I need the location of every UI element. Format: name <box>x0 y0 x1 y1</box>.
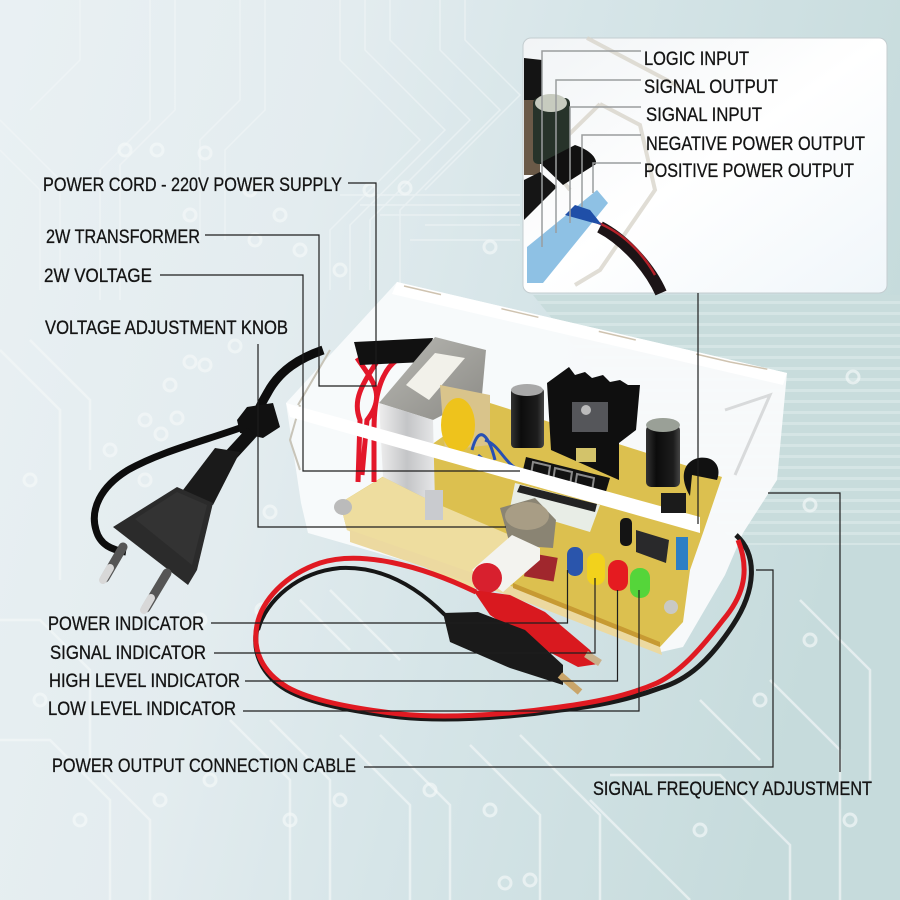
label: voltage: 2W VOLTAGE <box>44 266 152 287</box>
acrylic edge <box>545 38 680 285</box>
label: high level indicator: HIGH LEVEL INDICATOR <box>49 671 240 692</box>
ic <box>661 493 686 513</box>
capacitor arc <box>684 458 719 496</box>
transistor cube <box>636 530 669 563</box>
label: output cable: POWER OUTPUT CONNECTION CABLE <box>52 756 356 777</box>
acrylic case with circuit board <box>286 282 787 655</box>
wiring <box>357 358 397 482</box>
label: low level indicator: LOW LEVEL INDICATOR <box>48 699 236 720</box>
plug pins <box>105 547 123 578</box>
pcb <box>340 403 722 647</box>
knob <box>472 535 558 593</box>
cord knot <box>237 403 280 438</box>
label: power indicator: POWER INDICATOR <box>48 614 204 635</box>
led: signal yellow <box>587 553 605 585</box>
label: knob: VOLTAGE ADJUSTMENT KNOB <box>45 318 288 339</box>
plug body <box>113 487 213 585</box>
cable <box>600 227 661 293</box>
case body <box>286 282 787 652</box>
led: power blue <box>567 547 583 576</box>
capacitor <box>533 98 570 164</box>
front acrylic strip <box>286 403 700 533</box>
inset panel: output terminals <box>523 38 887 293</box>
red clip <box>473 590 598 667</box>
label: signal indicator: SIGNAL INDICATOR <box>50 643 206 664</box>
label: logic input: LOGIC INPUT <box>644 49 749 70</box>
label: positive power output: POSITIVE POWER OUTPUT <box>644 161 854 182</box>
blue terminal <box>527 190 608 283</box>
black arc <box>540 145 596 185</box>
transformer <box>334 337 490 520</box>
heatsink <box>524 58 542 100</box>
leader lines <box>160 183 840 772</box>
power output cable with clips <box>256 535 751 719</box>
pointer lines <box>542 51 641 247</box>
label: power cord: POWER CORD - 220V POWER SUPPLY <box>43 175 342 196</box>
potentiometer <box>500 498 556 548</box>
power cord and plug <box>94 350 323 610</box>
label: signal input: SIGNAL INPUT <box>646 105 762 126</box>
blue wires <box>472 435 520 475</box>
heatsink <box>547 367 640 480</box>
capacitor right <box>646 425 680 487</box>
label: negative power output: NEGATIVE POWER OUTPUT <box>646 134 865 155</box>
led: high red <box>608 560 628 591</box>
capacitor left <box>511 388 544 448</box>
label: signal output: SIGNAL OUTPUT <box>644 77 778 98</box>
led: low green <box>630 568 650 598</box>
digital display <box>510 457 610 532</box>
label: transformer: 2W TRANSFORMER <box>46 227 200 248</box>
strain relief <box>183 448 240 505</box>
black clip <box>443 612 563 685</box>
